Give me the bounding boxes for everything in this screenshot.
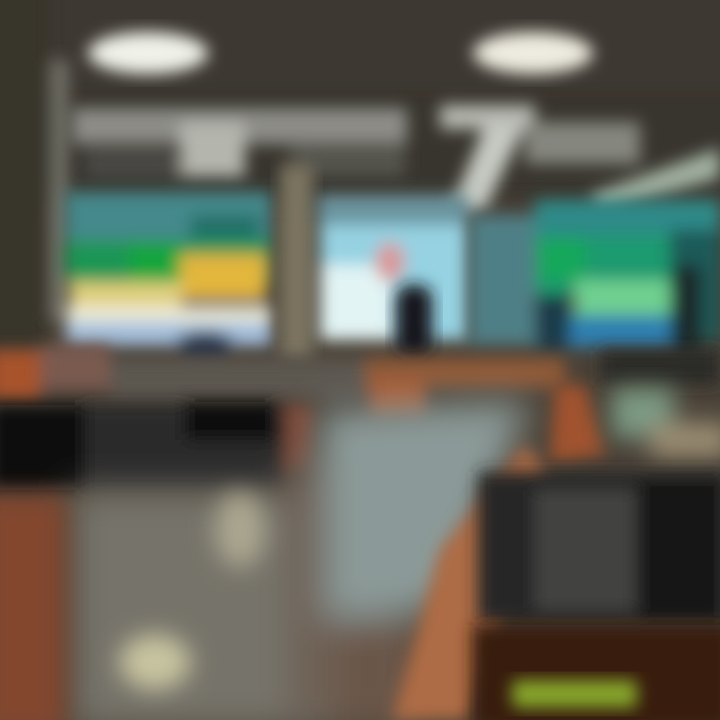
center screen bbox=[318, 195, 468, 340]
right side green panel bbox=[612, 388, 720, 458]
dark desk bbox=[0, 402, 313, 490]
floor bbox=[70, 400, 530, 720]
ceiling bbox=[0, 0, 720, 200]
floor light reflections bbox=[119, 492, 266, 690]
central column bbox=[280, 165, 313, 360]
dark cabinet bbox=[478, 472, 720, 622]
left pillar bbox=[0, 0, 68, 350]
left screen bbox=[66, 192, 271, 359]
diagonal wood counter bbox=[392, 385, 605, 720]
ceiling lights bbox=[88, 32, 593, 74]
signage band bbox=[72, 105, 720, 212]
left wood panel bbox=[0, 495, 65, 720]
front counter bbox=[0, 345, 720, 418]
brown base bbox=[472, 625, 720, 720]
person silhouette bbox=[396, 285, 432, 357]
right screen bbox=[470, 200, 720, 355]
green label bbox=[512, 680, 637, 708]
